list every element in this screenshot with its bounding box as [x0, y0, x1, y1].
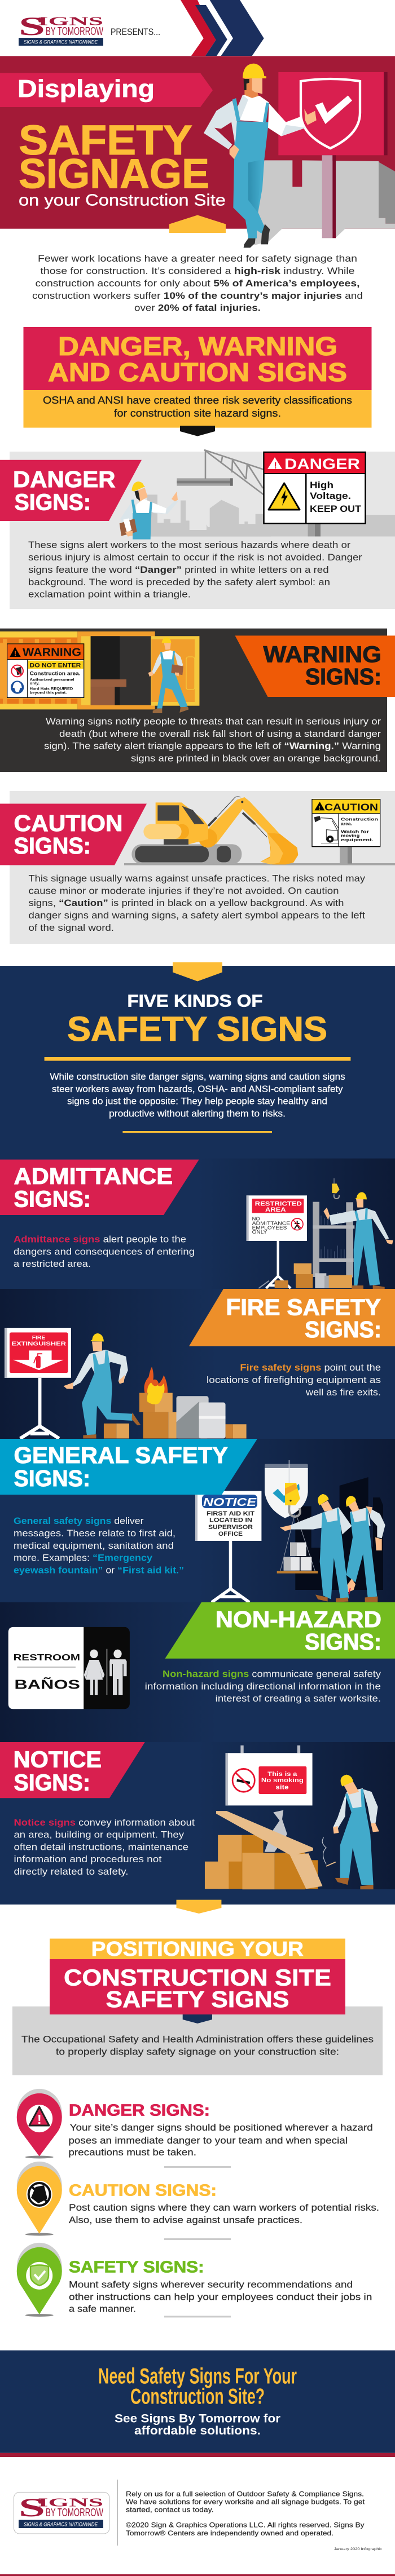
sign: caution: equipment.: [341, 837, 374, 842]
sign: warning do not enter: !: [14, 649, 16, 657]
sign: danger high voltage: KEEP OUT: [310, 503, 362, 514]
heading panel: Danger, Warning and Caution Signs: for construction site hazard signs.: [114, 408, 281, 419]
text: general safety description: more. Examples: “Emergency: [14, 1553, 153, 1563]
text: fire safety description: [207, 1362, 381, 1398]
CTA text: [115, 2412, 280, 2437]
intro paragraph: construction accounts for only about 5% of America’s employees,: [35, 278, 360, 289]
illustration: fire extinguisher sign, worker, burning box: [5, 1328, 247, 1438]
heading panel: Danger, Warning and Caution Signs: [24, 327, 371, 428]
sign: warning do not enter: Hard Hats REQUIRED: [30, 687, 73, 691]
ribbon: Fire Safety Signs: [189, 1289, 395, 1346]
ribbon: Displaying: Displaying: [17, 75, 155, 103]
panel: hero banner: [0, 56, 395, 248]
text: non-hazard description: [145, 1669, 381, 1704]
heading panel: Danger, Warning and Caution Signs: OSHA and ANSI have created three risk severity classifications: [43, 395, 352, 406]
sign: warning do not enter: beyond this point.: [30, 691, 67, 695]
sign: caution: Construction: [341, 817, 378, 822]
heading: five kinds of safety signs: SAFETY SIGNS: [67, 1010, 327, 1048]
sign: caution: moving: [341, 833, 360, 838]
logo: Signs By Tomorrow: IGNS: [38, 15, 103, 28]
sign: danger high voltage: Voltage.: [310, 491, 351, 501]
CTA text: affordable solutions.: [134, 2424, 261, 2437]
illustration: notice sign, crane hook and injured workers: [265, 1460, 385, 1602]
CTA heading: Need Safety Signs For Your: [98, 2365, 297, 2389]
guideline: safety signs: a safe manner.: [69, 2304, 136, 2314]
icon: safety pin: [17, 2243, 62, 2317]
text: caution description: signs, “Caution” is printed in black on a yellow background. As with: [28, 898, 344, 908]
text: danger description: exclamation point within a triangle.: [28, 589, 191, 600]
sign: fire extinguisher: [5, 1328, 71, 1438]
decorative chevrons: [181, 0, 264, 56]
sign: notice first aid kit: OFFICE: [218, 1531, 243, 1537]
ribbon: Notice Signs: NOTICE: [14, 1747, 102, 1773]
text: general safety description: General safety signs deliver: [14, 1515, 144, 1526]
text: caution description: [28, 873, 366, 933]
worker 1: [280, 1494, 352, 1602]
illustration: worker with clipboard: [120, 481, 179, 540]
arrow: yellow up pentagon: [169, 215, 226, 233]
ribbon: Warning Signs: SIGNS:: [305, 664, 381, 690]
text: admittance description: [14, 1234, 195, 1269]
CTA text: See Signs By Tomorrow for: [115, 2412, 280, 2425]
text: notice description: Notice signs convey information about: [14, 1817, 195, 1828]
sign: restricted area: AREA: [265, 1207, 286, 1213]
sign: caution: CAUTION: [324, 801, 378, 812]
text: warning description: Warning signs notify people to threats that can result in serious injury or: [46, 716, 381, 727]
ribbon: General Safety Signs: SIGNS:: [14, 1465, 90, 1491]
illustration: no smoking sign, planks and worker: [205, 1746, 379, 1889]
icon: danger pin: !: [37, 2112, 42, 2127]
guideline: safety signs: [17, 2243, 372, 2317]
footer logo: SIGNS & GRAPHICS NATIONWIDE: [24, 2521, 98, 2528]
arrow: yellow down to positioning section: [176, 1900, 221, 1914]
arrow: black down: [180, 426, 215, 436]
ribbon: Non-Hazard Signs: SIGNS:: [305, 1629, 381, 1655]
text: fire safety description: locations of firefighting equipment as: [207, 1375, 381, 1385]
logo: Signs By Tomorrow: BY TOMORROW: [46, 25, 103, 38]
sign: caution: [312, 799, 380, 864]
sign: danger high voltage: [264, 452, 366, 537]
footer text: Rely on us for a full selection of Outdoor Safety & Compliance Signs.: [126, 2490, 364, 2498]
panel: warning signs: [0, 629, 395, 772]
worker: [148, 638, 188, 713]
worker: [333, 1775, 379, 1889]
ribbon: Caution Signs: SIGNS:: [14, 833, 91, 859]
guideline: danger signs: Your site’s danger signs should be positioned wherever a hazard: [70, 2122, 373, 2133]
sign: warning do not enter: Authorized personnel: [30, 678, 74, 682]
heading: five kinds of safety signs: [45, 991, 350, 1061]
sign: restroom banos: [8, 1627, 130, 1709]
illustration: skyline and crane: [147, 450, 395, 537]
heading: five kinds of safety signs: FIVE KINDS OF: [128, 991, 263, 1011]
text: danger description: background. The word is preceded by the safety alert symbol: an: [28, 577, 330, 587]
text: notice description: directly related to safety.: [14, 1866, 129, 1877]
ribbon: Danger Signs: [0, 460, 142, 521]
worker 2: [343, 1496, 385, 1602]
panel: notice signs: [0, 1742, 395, 1889]
sign: caution: area.: [341, 821, 352, 826]
text: warning description: death (but where the overall risk fall short of using a standard danger: [59, 728, 381, 739]
guideline: caution signs: Post caution signs where they can warn workers of potential risks.: [69, 2202, 379, 2213]
sign: fire extinguisher: EXTINGUISHER: [12, 1341, 66, 1347]
guideline: caution signs: [17, 2162, 379, 2236]
text: intro to five kinds: [50, 1071, 345, 1119]
sign: danger high voltage: DANGER: [284, 456, 360, 472]
icon: caution pin: [17, 2162, 62, 2236]
sign: restricted area: [247, 1195, 307, 1288]
text: caution description: danger signs and warning signs, a safety alert symbol appears to the left: [28, 910, 365, 921]
arrow: yellow down: [173, 962, 222, 981]
intro paragraph: construction workers suffer 10% of the country’s major injuries and: [32, 290, 363, 301]
panel: positioning guidelines intro: [12, 1937, 383, 2075]
footer logo: IGNS: [38, 2495, 103, 2509]
title: Safety Signage: [19, 117, 209, 197]
sign: caution: Watch for: [341, 829, 369, 834]
worker: [64, 1333, 141, 1438]
text: intro to five kinds: While construction site danger signs, warning signs and caution signs: [50, 1071, 345, 1082]
footer text: Tomorrow® Centers are independently owned and operated.: [126, 2529, 333, 2537]
sign: restroom banos: RESTROOM: [14, 1652, 80, 1663]
text: warning description: sign). The safety alert triangle appears to the left of “Warning.” Warning: [44, 741, 381, 752]
sign: restricted area: RESTRICTED: [255, 1201, 302, 1208]
heading: positioning your construction site safety signs: [50, 1937, 345, 2014]
sign: warning do not enter: [7, 644, 84, 697]
intro paragraph: over 20% of fatal injuries.: [134, 303, 261, 313]
ribbon: Warning Signs: [235, 635, 395, 697]
heading panel: Danger, Warning and Caution Signs: DANGER, WARNING: [58, 332, 337, 361]
text: OSHA guidelines intro: [21, 2034, 374, 2057]
sign: no smoking: This is a: [267, 1771, 297, 1778]
ribbon: Fire Safety Signs: SIGNS:: [305, 1316, 381, 1342]
sign: warning do not enter: only.: [30, 682, 40, 686]
footer text: started, contact us today.: [126, 2506, 214, 2514]
logo: Signs By Tomorrow: SIGNS & GRAPHICS NATIONWIDE: [24, 39, 98, 45]
sign: no smoking: [226, 1746, 313, 1805]
text: notice description: [14, 1817, 195, 1877]
panel: non-hazard signs: [0, 1602, 395, 1742]
text: fire safety description: Fire safety signs point out the: [240, 1362, 381, 1373]
sign: danger high voltage: !: [274, 461, 277, 471]
text: intro to five kinds: signs do just the opposite: They help people stay healthy and: [67, 1096, 327, 1107]
ribbon: Danger Signs: SIGNS:: [15, 489, 91, 515]
icon: danger pin: [17, 2089, 62, 2158]
text: danger description: serious injury is almost certain to occur if the risk is not avoided. Danger: [28, 552, 362, 563]
subtitle: on your Construction Site: [19, 192, 226, 210]
text: caution description: of the signal word.: [28, 922, 114, 933]
sign: restricted area: ONLY: [252, 1229, 267, 1235]
sign: restroom banos: BAÑOS: [14, 1677, 80, 1692]
panel: admittance signs: [0, 1159, 395, 1289]
text: non-hazard description: information including directional information in the: [145, 1681, 381, 1691]
guideline: danger signs: precautions must be taken.: [68, 2147, 196, 2158]
ribbon: Caution Signs: [0, 804, 147, 865]
sign: warning do not enter: WARNING: [23, 646, 81, 659]
text: OSHA guidelines intro: to properly display safety signage on your construction site:: [56, 2047, 339, 2057]
panel: fire safety signs: [0, 1289, 395, 1439]
text: notice description: an area, building or equipment. They: [14, 1830, 185, 1840]
sign: warning do not enter: Construction area.: [30, 671, 81, 677]
heading: positioning your construction site safety signs: SAFETY SIGNS: [106, 1986, 289, 2012]
sign: restricted area: NO: [252, 1216, 260, 1222]
text: general safety description: messages. These relate to first aid,: [14, 1528, 175, 1539]
footer logo: BY TOMORROW: [46, 2507, 103, 2519]
text: caution description: cause minor or moderate injuries if they’re not avoided. On caution: [28, 885, 339, 896]
ribbon: General Safety Signs: GENERAL SAFETY: [14, 1442, 228, 1468]
text: danger description: [28, 540, 362, 600]
illustration: shipping container with worker: [0, 631, 199, 713]
heading: positioning your construction site safety signs: CONSTRUCTION SITE: [64, 1964, 331, 1990]
heading panel: Danger, Warning and Caution Signs: AND CAUTION SIGNS: [48, 357, 347, 387]
ribbon: Caution Signs: CAUTION: [14, 810, 123, 836]
ribbon: General Safety Signs: [0, 1439, 257, 1495]
sign: notice first aid kit: FIRST AID KIT: [207, 1510, 254, 1517]
text: non-hazard description: interest of creating a safer worksite.: [216, 1693, 381, 1704]
text: notice description: information and procedures not: [14, 1854, 162, 1864]
date note: January 2020 Infographic: [334, 2548, 382, 2551]
footer text: ©2020 Sign & Graphics Operations LLC. All rights reserved. Signs By: [126, 2521, 365, 2529]
text: warning description: signs are printed in black over an orange background.: [131, 753, 381, 763]
sign: warning do not enter: DO NOT ENTER: [30, 662, 81, 669]
guideline: caution signs: CAUTION SIGNS:: [69, 2182, 217, 2200]
arrow: navy down: [183, 2014, 212, 2023]
CTA heading: Construction Site?: [130, 2385, 265, 2409]
text: general safety description: [14, 1515, 184, 1575]
text: general safety description: eyewash fountain” or “First aid kit.”: [14, 1565, 184, 1575]
title: Safety Signage: SIGNAGE: [19, 150, 209, 197]
sign: no smoking: site: [275, 1784, 289, 1791]
title: Safety Signage: SAFETY: [19, 117, 192, 164]
ribbon: Fire Safety Signs: FIRE SAFETY: [226, 1294, 381, 1320]
sign: notice first aid kit: LOCATED IN: [209, 1517, 252, 1523]
illustration: restricted area sign and worker: [247, 1178, 393, 1289]
footer logo: S: [19, 2493, 45, 2522]
ribbon: Notice Signs: SIGNS:: [14, 1770, 90, 1796]
ribbon: Notice Signs: [0, 1742, 145, 1798]
text: warning description: [44, 716, 381, 763]
text: general safety description: medical equipment, sanitation and: [14, 1540, 174, 1551]
presents label: PRESENTS...: [111, 26, 160, 37]
text: admittance description: Admittance signs alert people to the: [14, 1234, 186, 1245]
sign: caution: !: [318, 806, 321, 812]
sign: no smoking: No smoking: [261, 1778, 304, 1784]
heading: positioning your construction site safety signs: POSITIONING YOUR: [91, 1937, 304, 1960]
ribbon: Admittance Signs: ADMITTANCE: [14, 1163, 173, 1189]
intro paragraph: Fewer work locations have a greater need for safety signage than: [38, 253, 357, 264]
text: intro to five kinds: steer workers away from hazards, OSHA- and ANSI-compliant safety: [52, 1084, 343, 1094]
sign: fire extinguisher: FIRE: [32, 1335, 46, 1341]
panel: danger signs: [0, 450, 395, 609]
panel: five kinds of safety signs: [0, 962, 395, 1905]
ribbon: Danger Signs: DANGER: [13, 466, 115, 492]
footer text: [126, 2490, 365, 2537]
sign: notice first aid kit: [195, 1491, 261, 1602]
guideline: danger signs: [17, 2089, 373, 2158]
CTA heading: [98, 2365, 297, 2409]
sign: notice first aid kit: SUPERVISOR: [208, 1524, 253, 1531]
text: danger description: signs feature the word “Danger” printed in white letters on a red: [28, 564, 329, 575]
illustration: worker pointing at safety shield sign: [204, 64, 395, 248]
text: admittance description: a restricted area.: [14, 1258, 91, 1269]
worker: [323, 1192, 393, 1289]
guideline: danger signs: poses an immediate danger to your team and when special: [68, 2135, 348, 2146]
text: admittance description: dangers and consequences of entering: [14, 1246, 195, 1257]
sign: danger high voltage: High: [310, 480, 333, 491]
guideline: danger signs: DANGER SIGNS:: [69, 2102, 210, 2120]
text: fire safety description: well as fire exits.: [305, 1387, 381, 1398]
guideline: caution signs: Also, use them to advise against unsafe practices.: [69, 2215, 302, 2225]
footer text: We have solutions for every worksite and all signage budgets. To get: [126, 2498, 365, 2506]
guideline: safety signs: SAFETY SIGNS:: [69, 2259, 204, 2277]
panel: call to action: [0, 2350, 395, 2457]
guideline: safety signs: Mount safety signs wherever security recommendations and: [69, 2279, 353, 2290]
sign: notice first aid kit: NOTICE: [203, 1496, 257, 1509]
panel: general safety signs: [0, 1439, 395, 1602]
intro paragraph: [32, 253, 363, 313]
ribbon: Warning Signs: WARNING: [263, 642, 381, 668]
text: caution description: This signage usually warns against unsafe practices. The risks noted may: [28, 873, 366, 884]
ribbon: Displaying: [0, 73, 213, 107]
text: OSHA guidelines intro: The Occupational Safety and Health Administration offers these guidelines: [21, 2034, 374, 2045]
sign: restricted area: ADMITTANCE: [252, 1220, 291, 1226]
ribbon: Non-Hazard Signs: [165, 1602, 395, 1659]
intro paragraph: those for construction. It’s considered a high-risk industry. While: [41, 266, 354, 276]
logo: Signs By Tomorrow: [19, 12, 103, 46]
panel: caution signs: [0, 791, 395, 944]
ribbon: Admittance Signs: [0, 1160, 199, 1215]
guideline: safety signs: other instructions can help your employees conduct their jobs in: [69, 2291, 372, 2303]
text: intro to five kinds: productive without alerting them to risks.: [109, 1108, 286, 1119]
text: non-hazard description: Non-hazard signs communicate general safety: [163, 1669, 381, 1680]
text: danger description: These signs alert workers to the most serious hazards where death or: [28, 540, 350, 550]
footer logo: [14, 2492, 109, 2534]
logo: Signs By Tomorrow: S: [19, 12, 45, 41]
text: notice description: often detail instructions, maintenance: [14, 1841, 188, 1852]
sign: restricted area: EMPLOYEES: [252, 1225, 287, 1230]
ribbon: Admittance Signs: SIGNS:: [14, 1186, 91, 1212]
ribbon: Non-Hazard Signs: NON-HAZARD: [216, 1606, 381, 1632]
illustration: excavator and caution sign: [124, 797, 395, 865]
